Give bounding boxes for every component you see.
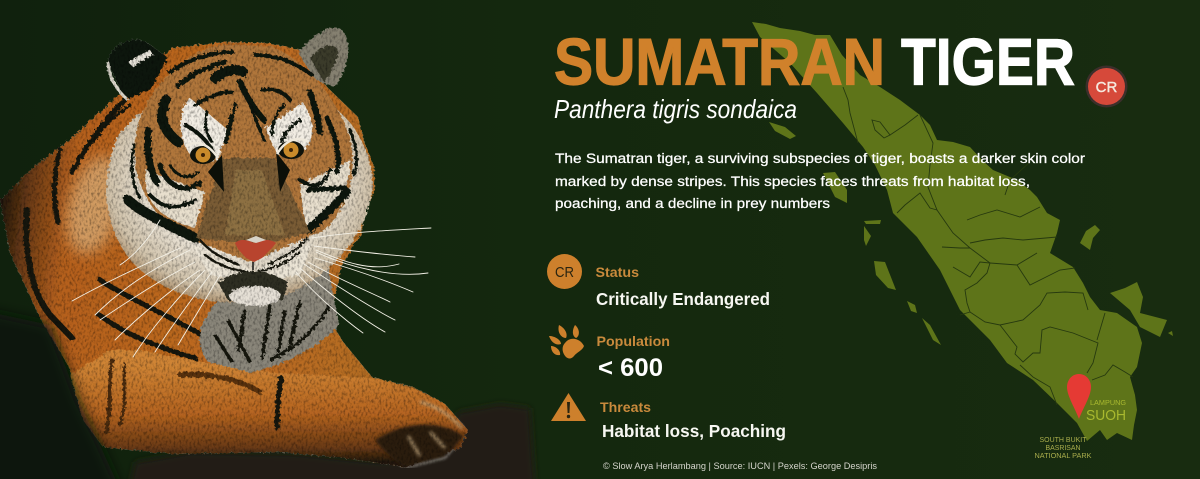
white eye patches [145,98,350,228]
left eye [186,143,218,164]
whiskers [72,220,431,357]
dark inner eye corners [208,152,290,192]
tiger photograph illustration [0,28,535,479]
map of Sumatra [752,22,1173,441]
body stripes [26,100,281,432]
main island landmass [752,22,1142,441]
icon: CR circle: CR [555,265,574,281]
tiger fur group [0,28,468,468]
paw shading [375,424,464,468]
face stripes [128,52,357,238]
small islands [769,122,1173,345]
right eye [277,139,309,159]
title: TIGER [901,24,1075,98]
right ear [298,28,348,87]
province borders [843,87,1133,405]
population row [549,325,670,382]
credits: © Slow Arya Herlambang | Source: IUCN | Pexels: George Desipris [603,461,877,472]
CR badge [1086,66,1128,108]
label: South Bukit Basrisan National Park: SOUTH BUKIT [1040,435,1087,444]
threats label: Threats [600,399,651,415]
label: South Bukit Basrisan National Park: NATIONAL PARK [1034,451,1092,460]
population label: Population [596,333,670,349]
status value: Critically Endangered [596,289,770,309]
threats value: Habitat loss, Poaching [602,421,786,441]
population value: < 600 [598,354,663,382]
rock under the paw [130,404,535,479]
lighter shoulder fur [57,150,133,260]
paw claws highlights [408,402,462,456]
threats row [551,393,786,441]
foreleg [70,350,468,467]
nose [235,236,276,270]
location pin [1067,374,1091,419]
white facial ruff [106,77,372,303]
title: SUMATRAN [554,24,885,98]
CR badge: CR [1096,79,1117,96]
icon: warning triangle [551,393,586,421]
label: South Bukit Basrisan National Park: BASRISAN [1046,443,1080,452]
orange face mask [135,44,353,262]
shadow on the flank [0,310,125,479]
label: Lampung Suoh: LAMPUNG [1090,398,1126,407]
description: The Sumatran tiger, a surviving subspecies of tiger, boasts a darker skin color [555,151,1086,166]
left ear [108,40,168,100]
label: South Bukit Basrisan National Park [1034,435,1092,460]
muzzle [192,238,312,306]
status label: Status [596,264,639,280]
label: Lampung Suoh [1086,398,1126,424]
label: Lampung Suoh: SUOH [1086,407,1126,424]
icon: CR circle [547,254,582,289]
scientific name: Panthera tigris sondaica [554,94,797,124]
nose bridge [196,158,310,242]
white neck and chest [200,265,339,372]
description [555,151,1086,211]
tiger body [0,42,468,467]
status row [547,254,770,309]
icon: paw [549,325,584,359]
Bangka island [1110,282,1167,337]
description: marked by dense stripes. This species faces threats from habitat loss, [555,174,1030,189]
description: poaching, and a decline in prey numbers [555,196,830,211]
